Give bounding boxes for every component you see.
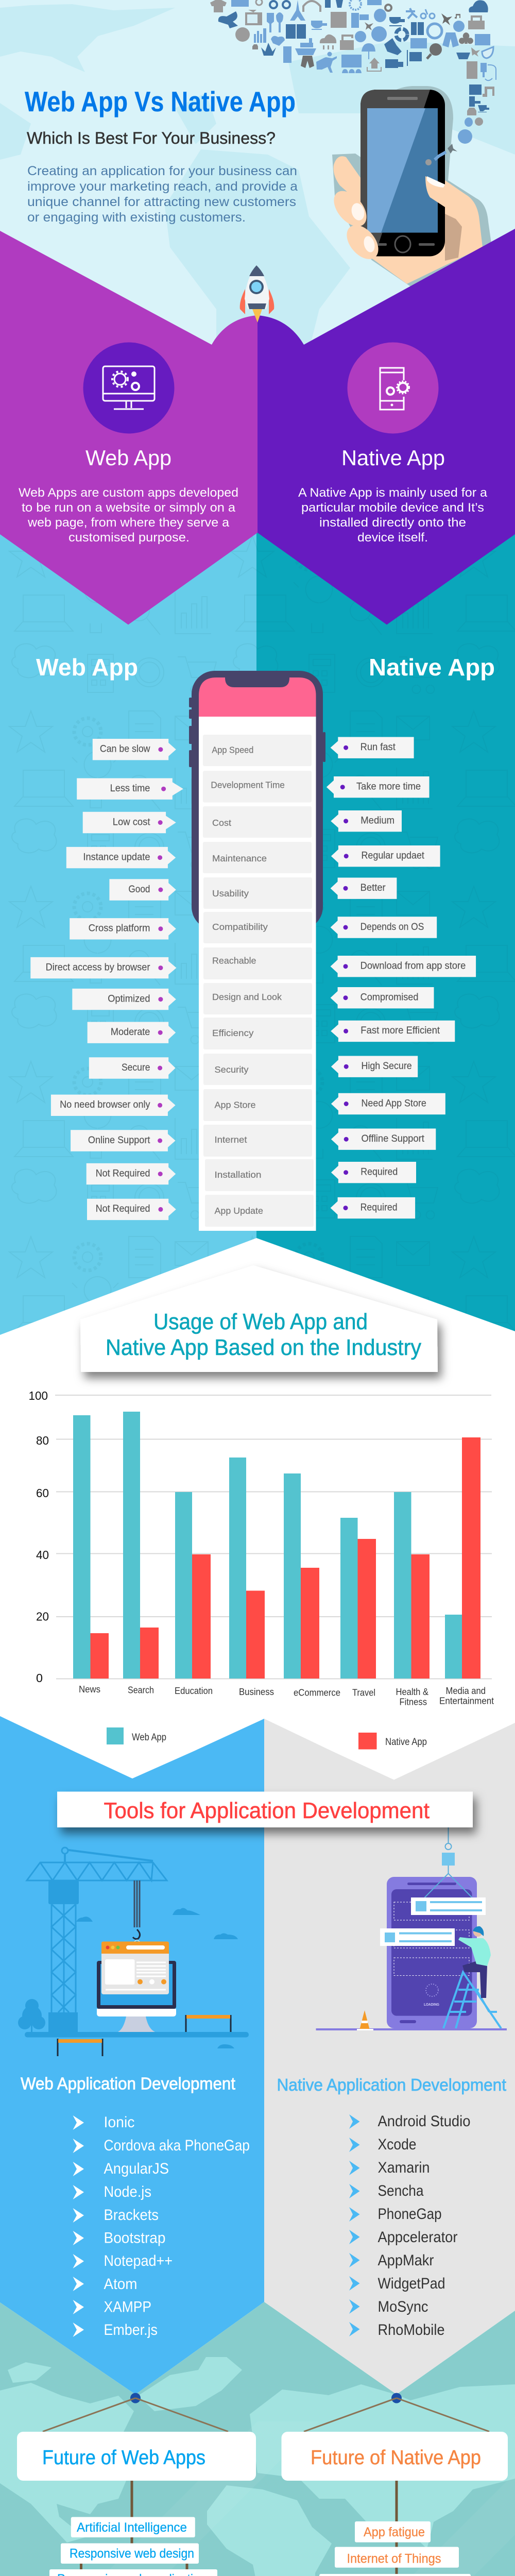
tag: regular update: Regular updaet	[362, 850, 425, 861]
panel: future background with world map	[0, 2302, 515, 2576]
tag: cross platform: Cross platform	[89, 923, 150, 934]
icon: headphones	[303, 1, 320, 12]
icon cloud: app icons flowing from phone	[210, 0, 496, 144]
tag: depends on os: Depends on OS	[360, 922, 424, 933]
icon: sun	[355, 31, 366, 42]
icon: people	[325, 0, 343, 8]
list: web tools: Atom	[104, 2276, 137, 2293]
list: native tools	[349, 2113, 471, 2338]
chart x axis labels: Health &	[396, 1687, 428, 1697]
chart y axis labels: 40	[36, 1548, 49, 1562]
list: native tools: Xamarin	[378, 2159, 430, 2176]
monitor	[97, 1961, 176, 2032]
list: native tools: AppMakr	[378, 2252, 434, 2269]
icon: thumbs up	[384, 38, 402, 55]
placeholder slots	[394, 1902, 469, 1975]
icon: mobile handset	[467, 61, 477, 79]
hanging card	[411, 1897, 486, 1915]
chart x axis labels: News	[79, 1684, 100, 1694]
tag: better	[331, 878, 397, 899]
list: web tools: Brackets	[104, 2207, 159, 2224]
panel: web app definition	[0, 231, 258, 624]
heading panel: usage by industry: Native App Based on the Industry	[106, 1335, 421, 1360]
text: native app description	[298, 486, 488, 545]
loading spinner: LOADING	[424, 2003, 440, 2007]
icon: bars	[254, 28, 266, 43]
icon: small plane	[471, 47, 480, 57]
pin	[391, 2393, 402, 2403]
phone mockup with criteria list	[189, 671, 325, 1231]
heading panel: usage by industry	[80, 1265, 438, 1372]
list: native tools: Android Studio	[378, 2113, 471, 2130]
list: web tools: XAMPP	[104, 2299, 151, 2315]
chart y axis labels: 80	[36, 1434, 49, 1447]
tag: medium: Medium	[360, 815, 394, 826]
list chevrons	[349, 2114, 359, 2336]
icon: basket	[456, 53, 470, 59]
legend: native app	[358, 1733, 427, 1750]
legend: web app: Web App	[132, 1732, 166, 1743]
icon: recycle arrows	[396, 29, 407, 40]
icon: gear	[385, 5, 391, 11]
icon: microphone	[480, 63, 487, 77]
tag: secure	[89, 1057, 176, 1079]
tag: low cost	[83, 812, 176, 833]
illustration: rocket	[240, 265, 274, 323]
tag: good	[109, 879, 176, 901]
list: native tools: Appcelerator	[378, 2229, 457, 2246]
heading panel: usage by industry: Usage of Web App and	[153, 1309, 368, 1334]
heading: web app: Web App	[85, 446, 171, 470]
icon: paperclip	[256, 0, 262, 5]
legend: native app: Native App	[385, 1737, 427, 1748]
strings	[43, 2398, 228, 2432]
crane hook	[131, 1880, 143, 1944]
icon: music player	[351, 13, 369, 28]
diagram: future of native app	[281, 2393, 508, 2576]
tag: not required 2	[87, 1199, 176, 1220]
tag: no need browser only	[51, 1095, 176, 1116]
text: web app description: to be run on a website or simply on a	[22, 501, 236, 515]
chart y axis labels: 100	[29, 1389, 48, 1402]
tag: moderate: Moderate	[111, 1027, 150, 1038]
chart x axis labels: Fitness	[400, 1697, 427, 1707]
list chevrons	[73, 2115, 84, 2337]
tag: can be slow: Can be slow	[100, 744, 150, 754]
tag: download from app store: Download from app store	[360, 960, 466, 972]
icon: car	[252, 44, 258, 49]
icon: leaf outline	[482, 47, 493, 58]
pin	[130, 2393, 141, 2403]
icon: music note	[455, 14, 460, 19]
browser window	[101, 1941, 169, 1994]
illustration: hand holding phone	[328, 86, 493, 287]
text: web app description: web page, from where they serve a	[27, 516, 230, 530]
placed card	[380, 1928, 455, 1946]
tag: not required: Not Required	[96, 1168, 150, 1179]
icon: shorts	[442, 32, 459, 47]
tag: no need browser only: No need browser only	[60, 1099, 150, 1110]
illustration: crane building web page	[18, 1848, 249, 2056]
tag: high secure: High Secure	[362, 1061, 412, 1072]
chart x axis labels: eCommerce	[294, 1688, 340, 1698]
web app bars	[73, 1412, 462, 1679]
loading spinner	[424, 1984, 440, 2007]
tag: compromised: Compromised	[360, 992, 418, 1003]
text: native app description: A Native App is mainly used for a	[298, 486, 488, 500]
icon: compass	[371, 26, 387, 42]
icon: camera	[475, 34, 490, 45]
strings	[304, 2398, 489, 2432]
tag: depends on os	[331, 917, 437, 938]
list: web tools: Cordova aka PhoneGap	[104, 2137, 250, 2154]
panel: native tools background	[264, 1719, 515, 2395]
panel: native app definition	[258, 229, 515, 624]
list: native tools: MoSync	[378, 2298, 428, 2315]
phone mockup with criteria list: Security	[214, 1064, 249, 1075]
trend items: App fatigue	[364, 2525, 425, 2539]
tag: fast more efficient	[331, 1021, 455, 1042]
intro text	[27, 164, 298, 225]
tag: less time: Less time	[110, 783, 150, 794]
tag: regular update	[331, 845, 440, 867]
trend items: Internet of Things	[347, 2552, 441, 2566]
tag: download from app store	[331, 956, 476, 977]
tag: fast more efficient: Fast more Efficient	[360, 1025, 440, 1036]
icon: cloud	[469, 0, 488, 12]
icon: power button	[427, 24, 442, 38]
chart x axis labels: Entertainment	[439, 1696, 494, 1706]
icon: grey compass	[475, 117, 483, 126]
phone mockup with criteria list: Installation	[214, 1170, 262, 1180]
phone mockup with criteria list: Usability	[212, 888, 249, 899]
tag: required: Required	[360, 1166, 398, 1178]
icon: bike	[270, 1, 290, 8]
list: native tools: RhoMobile	[378, 2321, 445, 2338]
chart x axis labels: Education	[175, 1686, 213, 1696]
icon: screen with seats	[341, 55, 362, 73]
icon: umbrella	[362, 43, 375, 59]
icon: video camera	[385, 59, 403, 68]
tag: not required	[87, 1163, 176, 1184]
connectors	[340, 2481, 455, 2576]
icon: hearts	[271, 36, 285, 46]
trend items	[49, 2517, 217, 2576]
text: native app description: device itself.	[357, 531, 428, 545]
tag: not required 2: Not Required	[96, 1204, 150, 1214]
intro text: Creating an application for your business can	[27, 164, 297, 178]
list: native tools: PhoneGap	[378, 2206, 442, 2223]
icon: club	[459, 32, 473, 44]
intro text: or engaging with existing customers.	[27, 210, 246, 225]
text: native app description: installed directly onto the	[319, 516, 466, 530]
tag: secure: Secure	[122, 1062, 150, 1073]
list: native app attribute tags	[327, 737, 476, 1218]
ground line	[316, 2028, 507, 2030]
tag: optimized	[72, 989, 176, 1010]
chart y axis labels: 20	[36, 1609, 49, 1623]
heading: native app: Native App	[341, 446, 445, 470]
connectors	[81, 2481, 187, 2576]
icon: native app phone with gears	[347, 342, 439, 434]
icon: upload tray	[367, 58, 382, 72]
list: web tools: AngularJS	[104, 2160, 169, 2177]
traffic cone	[357, 2010, 373, 2030]
tag: run fast	[331, 737, 414, 758]
heading box	[17, 2432, 256, 2481]
icon: information	[331, 12, 347, 28]
ladder	[443, 1972, 501, 2028]
heading: web app column: Web App	[36, 654, 138, 681]
icon: box	[367, 0, 382, 5]
intro text: improve your marketing reach, and provide a	[27, 179, 298, 194]
icon: rain cloud	[320, 35, 336, 49]
icon: small compass	[453, 21, 465, 32]
icon: airplane	[441, 13, 452, 25]
icon: flag	[407, 50, 422, 66]
tag: offline support: Offline Support	[362, 1133, 425, 1144]
icon: camcorder	[469, 96, 480, 107]
trend items: Artificial Intelligence	[77, 2520, 187, 2535]
tag: required 2: Required	[360, 1202, 398, 1213]
tag: take more time: Take more time	[356, 781, 421, 792]
icon: small car	[467, 108, 476, 115]
phone mockup with criteria list: Internet	[214, 1134, 247, 1145]
icon: coffee	[389, 17, 405, 26]
icon: teacup	[478, 105, 489, 112]
intro text: unique channel for attracting new customers	[27, 195, 296, 209]
heading: native app column: Native App	[369, 654, 495, 681]
tag: cross platform	[70, 918, 176, 940]
list: web tools: Ember.js	[104, 2321, 158, 2338]
ground	[25, 2032, 249, 2037]
phone body	[387, 1877, 477, 2028]
tag: required 2	[331, 1197, 415, 1218]
tag: high secure	[331, 1056, 418, 1077]
illustration: phone being assembled	[316, 1827, 507, 2030]
tag: run fast: Run fast	[360, 742, 396, 753]
icon: snowflake	[350, 0, 361, 10]
heading: native application development: Native Application Development	[277, 2075, 506, 2094]
text: web app description: Web Apps are custom apps developed	[19, 486, 238, 500]
icon: eiffel tower	[290, 0, 305, 21]
icon: disc	[458, 129, 472, 144]
tag: optimized: Optimized	[108, 993, 150, 1004]
chart y axis labels	[29, 1389, 49, 1685]
icon: book	[411, 22, 424, 35]
tag: need app store	[331, 1093, 445, 1114]
list: web tools: Node.js	[104, 2183, 151, 2200]
rope and hook	[425, 1827, 472, 1897]
subtitle: Which Is Best For Your Business?	[27, 129, 276, 147]
tag: online support: Online Support	[88, 1135, 150, 1146]
chart x axis labels: Media and	[446, 1686, 486, 1696]
phone mockup with criteria list: Reachable	[212, 955, 256, 965]
phone mockup with criteria list: Cost	[212, 818, 231, 828]
tag: need app store: Need App Store	[362, 1098, 426, 1109]
tag: instance update: Instance update	[83, 852, 150, 862]
icon: magnifier plus	[430, 43, 442, 56]
icon: leaf plant	[261, 43, 276, 56]
climbing person	[458, 1926, 491, 1998]
legend: web app	[107, 1727, 166, 1744]
list: native tools: Sencha	[378, 2182, 424, 2199]
icon: keyboard	[231, 0, 249, 7]
panel: web tools background	[0, 1716, 264, 2395]
icon: armchair	[469, 84, 482, 95]
icon: apple	[374, 9, 386, 22]
clouds	[76, 1908, 238, 2048]
barriers	[58, 2015, 231, 2056]
icon: speakers	[286, 24, 306, 39]
list: web tools: Notepad++	[104, 2252, 173, 2269]
tag: good: Good	[128, 884, 150, 895]
tag: can be slow	[93, 739, 176, 760]
crane tower	[27, 1850, 167, 2012]
icon: cup	[311, 21, 327, 30]
tag: online support	[71, 1130, 176, 1151]
tag: compromised	[331, 987, 434, 1008]
title: Web App Vs Native App	[25, 86, 296, 117]
panel: intro background with world map	[0, 0, 515, 371]
list: web tools	[73, 2114, 250, 2338]
icon: butterfly	[218, 11, 238, 28]
chart gridlines	[55, 1395, 492, 1679]
text: native app description: particular mobile device and It’s	[301, 501, 484, 515]
icon: small apple	[465, 117, 473, 127]
phone mockup with criteria list: App Store	[214, 1099, 255, 1110]
text: web app description	[19, 486, 238, 545]
phone mockup with criteria list: App Speed	[212, 744, 253, 755]
list: web tools: Ionic	[104, 2114, 135, 2131]
icon: pants	[301, 56, 314, 68]
chart y axis labels: 60	[36, 1486, 49, 1500]
tree	[18, 1999, 45, 2032]
phone mockup with criteria list: Development Time	[211, 780, 285, 790]
chart x axis labels: Search	[128, 1685, 154, 1695]
heading: web application development: Web Application Development	[21, 2074, 235, 2093]
icon: padlock	[468, 21, 485, 29]
chart x axis labels	[79, 1684, 494, 1707]
heading box	[281, 2432, 508, 2481]
icon: globe	[235, 27, 250, 42]
heading panel: tools for application development	[57, 1792, 473, 1827]
icon: tube	[283, 46, 291, 63]
phone mockup with criteria list: Efficiency	[212, 1028, 254, 1038]
icon: ship	[295, 38, 316, 55]
text: web app description: customised purpose.	[68, 531, 190, 545]
tag: moderate	[88, 1022, 176, 1043]
chart x axis labels: Travel	[352, 1688, 375, 1698]
trend items: Responsive web design	[70, 2547, 194, 2561]
tag: medium	[331, 810, 402, 832]
tag: direct access by browser: Direct access by browser	[46, 962, 150, 973]
list: web app attribute tags	[30, 739, 183, 1220]
chart y axis labels: 0	[36, 1671, 43, 1685]
tag: direct access by browser	[30, 957, 177, 978]
icon: t-shirt	[210, 0, 227, 12]
native app bars	[91, 1437, 480, 1679]
icon: envelope	[410, 38, 427, 48]
tag: better: Better	[360, 883, 386, 893]
phone mockup with criteria list: Maintenance	[212, 853, 267, 863]
tag: less time	[77, 778, 183, 800]
list: web tools: Bootstrap	[104, 2230, 166, 2246]
icon: unlocked padlock	[340, 40, 354, 50]
icon: runner with bag	[316, 52, 337, 73]
tag: required	[331, 1162, 416, 1183]
icon: runner	[406, 8, 417, 19]
icon: television	[245, 10, 262, 25]
phone mockup with criteria list: Compatibility	[212, 922, 268, 932]
list: native tools: WidgetPad	[378, 2275, 445, 2292]
panel: comparison background	[0, 515, 515, 1335]
phone mockup with criteria list: App Update	[214, 1206, 263, 1216]
heading panel: tools for application development: Tools for Application Development	[104, 1798, 430, 1823]
heading box: Future of Web Apps	[42, 2447, 205, 2469]
icon: fork and spoon	[267, 12, 283, 32]
icon: web app monitor with gears	[83, 342, 174, 434]
trend items	[285, 2521, 505, 2576]
chart x axis labels: Business	[239, 1687, 274, 1697]
list: native tools: Xcode	[378, 2136, 416, 2153]
tag: take more time	[327, 776, 430, 798]
icon: cyclist	[421, 9, 435, 19]
tag: instance update	[66, 847, 176, 868]
phone mockup with criteria list: Design and Look	[212, 992, 282, 1002]
icon: plane	[365, 22, 373, 30]
diagram: future of web apps	[17, 2393, 256, 2576]
tag: offline support	[331, 1128, 436, 1150]
bar chart: web app vs native app usage by industry	[29, 1389, 494, 1707]
tag: low cost: Low cost	[113, 817, 150, 827]
heading box: Future of Native App	[311, 2447, 481, 2469]
icon: music note 2	[483, 87, 494, 97]
